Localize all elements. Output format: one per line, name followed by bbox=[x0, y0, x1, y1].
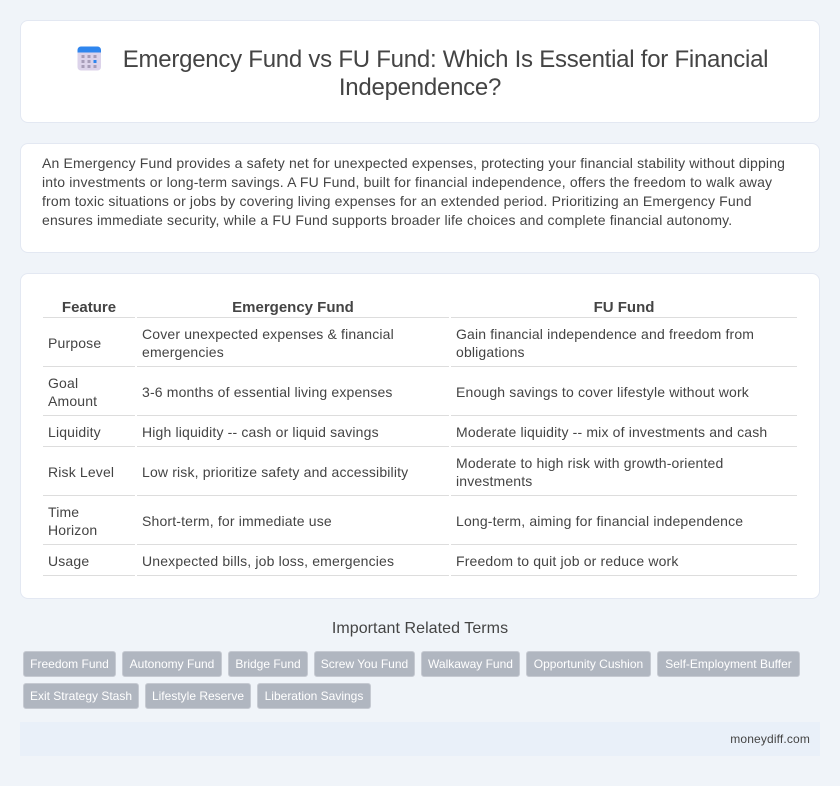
tag bbox=[122, 651, 222, 677]
comparison table: 3-6 months of essential living expenses bbox=[142, 384, 393, 400]
header panel bbox=[20, 20, 820, 123]
tag bbox=[23, 683, 139, 709]
comparison table: Time bbox=[48, 504, 79, 520]
comparison table: investments bbox=[456, 473, 532, 489]
comparison table: Moderate to high risk with growth-oriented bbox=[456, 455, 723, 471]
tag: Opportunity Cushion bbox=[534, 657, 643, 671]
related terms tags bbox=[23, 651, 800, 709]
comparison table: Horizon bbox=[48, 522, 97, 538]
comparison table: FU Fund bbox=[594, 298, 654, 316]
tag bbox=[314, 651, 415, 677]
tag bbox=[421, 651, 520, 677]
comparison table: Unexpected bills, job loss, emergencies bbox=[142, 553, 394, 569]
comparison table: Emergency Fund bbox=[232, 298, 354, 316]
tag bbox=[657, 651, 800, 677]
intro text: An Emergency Fund provides a safety net for unexpected expenses, protecting your financial stability without dipping bbox=[42, 155, 785, 171]
intro text bbox=[42, 155, 785, 228]
comparison table: emergencies bbox=[142, 344, 224, 360]
intro text: into investments or long-term savings. A FU Fund, built for financial independence, offers the freedom to walk away bbox=[42, 174, 772, 190]
comparison table: Purpose bbox=[48, 335, 101, 351]
footer bbox=[20, 722, 820, 756]
comparison table: Gain financial independence and freedom from bbox=[456, 326, 754, 342]
title: Emergency Fund vs FU Fund: Which Is Essential for Financial bbox=[123, 46, 768, 73]
intro text: ensures immediate security, while a FU Fund supports broader life choices and complete financial autonomy. bbox=[42, 212, 732, 228]
title bbox=[123, 46, 768, 101]
tag: Walkaway Fund bbox=[428, 657, 513, 671]
tag bbox=[23, 651, 116, 677]
comparison table: Long-term, aiming for financial independence bbox=[456, 513, 743, 529]
comparison table: Amount bbox=[48, 393, 97, 409]
comparison table: Moderate liquidity -- mix of investments and cash bbox=[456, 424, 767, 440]
intro text: from toxic situations or jobs by covering living expenses for an extended period. Prioritizing an Emergency Fund bbox=[42, 193, 752, 209]
tag: Screw You Fund bbox=[321, 657, 408, 671]
tag: Bridge Fund bbox=[235, 657, 301, 671]
tag bbox=[257, 683, 371, 709]
related terms heading: Important Related Terms bbox=[332, 620, 508, 637]
tag: Freedom Fund bbox=[30, 657, 109, 671]
comparison table: Enough savings to cover lifestyle without work bbox=[456, 384, 749, 400]
tag bbox=[145, 683, 251, 709]
tag bbox=[228, 651, 308, 677]
comparison table: obligations bbox=[456, 344, 525, 360]
tag: Lifestyle Reserve bbox=[152, 689, 244, 703]
tag bbox=[526, 651, 651, 677]
footer: moneydiff.com bbox=[730, 732, 810, 746]
comparison table: High liquidity -- cash or liquid savings bbox=[142, 424, 379, 440]
title: Independence? bbox=[339, 74, 501, 101]
comparison table: Risk Level bbox=[48, 464, 114, 480]
comparison table: Short-term, for immediate use bbox=[142, 513, 332, 529]
tag: Liberation Savings bbox=[265, 689, 363, 703]
comparison table bbox=[43, 298, 797, 576]
comparison table: Feature bbox=[62, 298, 116, 316]
comparison table: Cover unexpected expenses & financial bbox=[142, 326, 394, 342]
tag: Exit Strategy Stash bbox=[30, 689, 132, 703]
icon: calendar bbox=[78, 46, 101, 70]
comparison table: Usage bbox=[48, 553, 89, 569]
comparison table: Freedom to quit job or reduce work bbox=[456, 553, 679, 569]
comparison table: Goal bbox=[48, 375, 78, 391]
intro panel bbox=[20, 143, 820, 253]
tag: Self-Employment Buffer bbox=[665, 657, 792, 671]
comparison table: Liquidity bbox=[48, 424, 101, 440]
tag: Autonomy Fund bbox=[130, 657, 214, 671]
comparison table: Low risk, prioritize safety and accessibility bbox=[142, 464, 408, 480]
comparison panel bbox=[20, 273, 820, 599]
